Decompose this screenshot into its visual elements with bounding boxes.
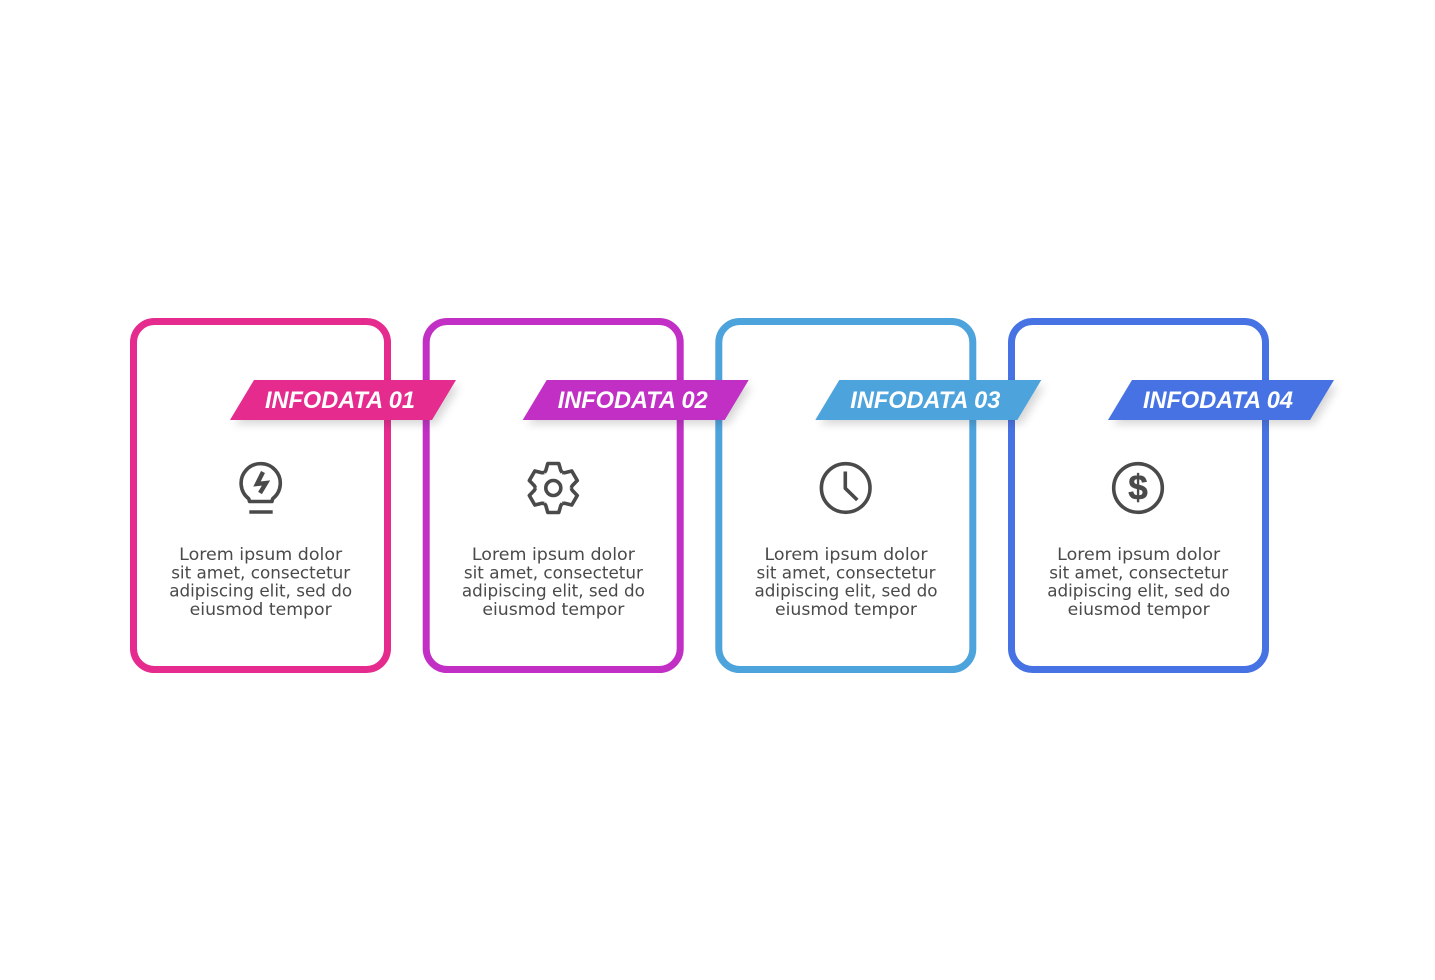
card 01 — [134, 322, 459, 670]
card 03 body text: eiusmod tempor — [775, 599, 917, 619]
card 02 body text: Lorem ipsum dolor — [472, 544, 635, 564]
card 02 heading: INFODATA 02 — [558, 387, 708, 414]
card 03 body text: Lorem ipsum dolor — [764, 544, 928, 564]
card 03 banner shadow — [820, 386, 1044, 424]
card 01 frame — [134, 322, 388, 670]
card 01 body text: sit amet, consectetur — [171, 562, 350, 582]
card 04 body text: sit amet, consectetur — [1049, 562, 1228, 582]
card 02 body text: adipiscing elit, sed do — [462, 581, 645, 601]
card 03 body text: sit amet, consectetur — [756, 562, 936, 582]
card 01 body text: adipiscing elit, sed do — [169, 581, 352, 601]
card 02 frame — [426, 322, 680, 670]
card 04 body text: eiusmod tempor — [1068, 599, 1210, 619]
card 02 body text: eiusmod tempor — [482, 599, 624, 619]
card 03 — [719, 322, 1044, 670]
card 04 frame — [1012, 322, 1266, 670]
icon: gear — [528, 464, 579, 512]
card 04 body text: Lorem ipsum dolor — [1057, 544, 1220, 564]
card 03 heading: INFODATA 03 — [850, 387, 1001, 414]
card 04 banner — [1108, 380, 1334, 420]
card 01 body text: Lorem ipsum dolor — [179, 544, 342, 564]
icon: light bulb — [241, 464, 280, 512]
card 04 — [1012, 322, 1337, 670]
card 02 body text: sit amet, consectetur — [464, 562, 643, 582]
card 02 banner shadow — [528, 386, 752, 424]
card 02 — [426, 322, 752, 670]
card 04 body text: adipiscing elit, sed do — [1047, 581, 1230, 601]
card 03 body text: adipiscing elit, sed do — [754, 581, 938, 601]
card 01 banner — [230, 380, 456, 420]
card 03 banner — [815, 380, 1041, 420]
card 03 frame — [719, 322, 973, 670]
card 01 heading: INFODATA 01 — [265, 387, 415, 414]
card 01 body text: eiusmod tempor — [190, 599, 332, 619]
icon: dollar coin: $ — [1128, 468, 1148, 508]
card 01 banner shadow — [235, 386, 459, 424]
card 04 heading: INFODATA 04 — [1143, 387, 1293, 414]
icon: clock — [821, 464, 870, 512]
icon: dollar coin — [1114, 464, 1162, 512]
card 04 banner shadow — [1113, 386, 1337, 424]
card 02 banner — [523, 380, 749, 420]
